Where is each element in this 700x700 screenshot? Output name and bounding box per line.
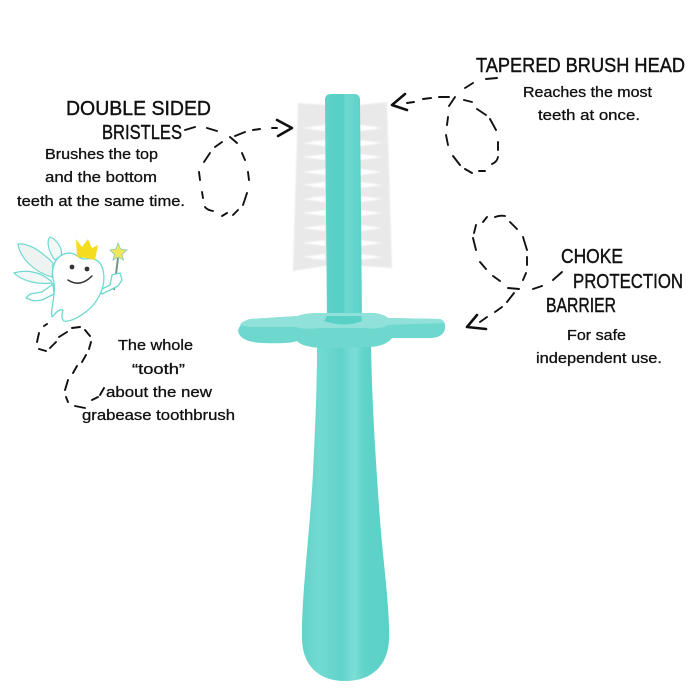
callout: double sided bristles [17,98,292,216]
brush stem [325,94,362,322]
dashed arrow [467,216,562,329]
toothbrush product [238,94,445,681]
heading: TAPERED BRUSH HEAD [476,55,685,77]
description: For safe [567,327,626,344]
description: about the new [106,384,212,401]
callout: tapered brush head [392,55,685,173]
handle [302,345,389,681]
heading: CHOKE [561,246,623,268]
description: independent use. [536,350,662,367]
choke protection barrier [238,313,445,348]
wings [14,237,61,284]
dashed line from fairy [37,324,104,408]
heading [66,98,211,144]
description [82,337,235,424]
description: Brushes the top [45,146,158,163]
heading: BRISTLES [102,122,182,144]
heading [546,246,683,317]
description: grabease toothbrush [82,407,235,424]
wand [110,243,127,290]
crown [76,239,98,260]
heading: DOUBLE SIDED [66,98,211,120]
description: The whole [118,337,193,354]
callout: the whole tooth [37,324,235,424]
dashed arrow [185,120,292,216]
description: teeth at once. [538,107,640,124]
callout: choke protection barrier [467,216,683,367]
description [536,327,662,367]
description [17,146,185,210]
arms and hands [26,273,122,301]
icon: tooth fairy [14,237,127,321]
description: “tooth” [132,361,185,378]
heading: BARRIER [546,295,616,317]
dashed arrow [392,78,498,173]
description [523,84,653,124]
description: teeth at the same time. [17,193,185,210]
face [68,265,92,283]
tooth body [52,253,104,321]
description: Reaches the most [523,84,653,101]
bristles [293,102,392,271]
description: and the bottom [45,169,157,186]
